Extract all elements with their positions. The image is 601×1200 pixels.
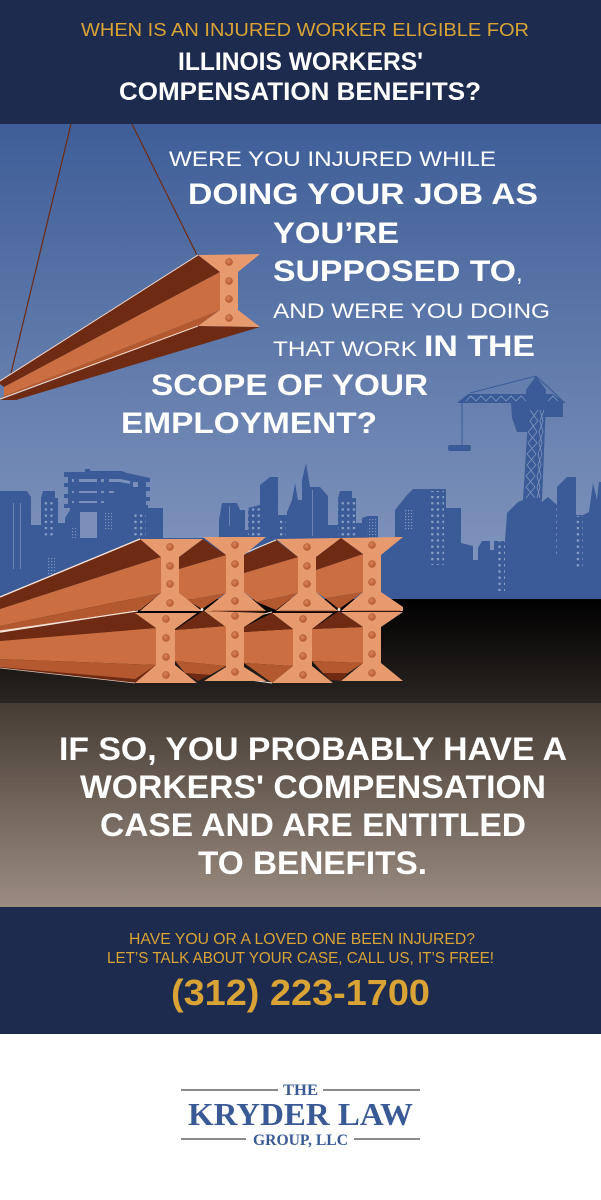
crane cables: [11, 124, 197, 373]
lower row of beams: [0, 611, 403, 683]
hanging steel beam: [0, 254, 260, 400]
main question text: THAT WORK: [273, 337, 418, 361]
main question text: IN THE: [424, 330, 535, 363]
main question text: DOING YOUR JOB AS: [188, 178, 538, 211]
upper row of beams: [0, 537, 403, 631]
header title: [119, 48, 481, 106]
stacked steel beams: [0, 537, 403, 683]
sky background: [0, 124, 601, 600]
conclusion text: WORKERS' COMPENSATION: [80, 769, 546, 805]
call to action text: LET’S TALK ABOUT YOUR CASE, CALL US, IT’S FREE!: [107, 950, 494, 967]
main question text: EMPLOYMENT?: [121, 407, 377, 440]
logo: The Kryder Law Group, LLC: KRYDER LAW: [188, 1096, 413, 1132]
main question text: ,: [516, 260, 523, 287]
stack rivets: [162, 542, 376, 678]
conclusion text: CASE AND ARE ENTITLED: [100, 807, 526, 843]
header banner: [0, 0, 601, 124]
main question text: YOU’RE: [273, 217, 399, 250]
conclusion text: IF SO, YOU PROBABLY HAVE A: [59, 731, 567, 767]
ground: [0, 599, 601, 704]
main question text: SCOPE OF YOUR: [151, 369, 428, 402]
white logo area: [0, 1034, 601, 1200]
logo: The Kryder Law Group, LLC: GROUP, LLC: [253, 1132, 348, 1149]
main question text: SUPPOSED TO: [273, 255, 516, 288]
call to action text: HAVE YOU OR A LOVED ONE BEEN INJURED?: [129, 931, 475, 948]
logo: The Kryder Law Group, LLC: [181, 1082, 420, 1149]
conclusion text: [59, 731, 567, 881]
header title: ILLINOIS WORKERS': [178, 48, 423, 76]
main question text: WERE YOU INJURED WHILE: [169, 147, 496, 171]
main question text: AND WERE YOU DOING: [273, 299, 550, 323]
construction crane: [448, 376, 565, 500]
conclusion band: [0, 703, 601, 907]
conclusion text: TO BENEFITS.: [198, 845, 427, 881]
parking structure: [64, 469, 150, 538]
call to action text: [107, 931, 494, 967]
header title: COMPENSATION BENEFITS?: [119, 78, 481, 106]
main question text: [121, 147, 550, 440]
header eyebrow: WHEN IS AN INJURED WORKER ELIGIBLE FOR: [81, 19, 529, 40]
city skyline: [0, 463, 601, 600]
logo: The Kryder Law Group, LLC: THE: [283, 1082, 318, 1099]
phone number: (312) 223-1700: [171, 972, 430, 1013]
skyline windows: [13, 490, 583, 591]
beam rivets: [226, 258, 232, 322]
call to action footer: [0, 907, 601, 1034]
